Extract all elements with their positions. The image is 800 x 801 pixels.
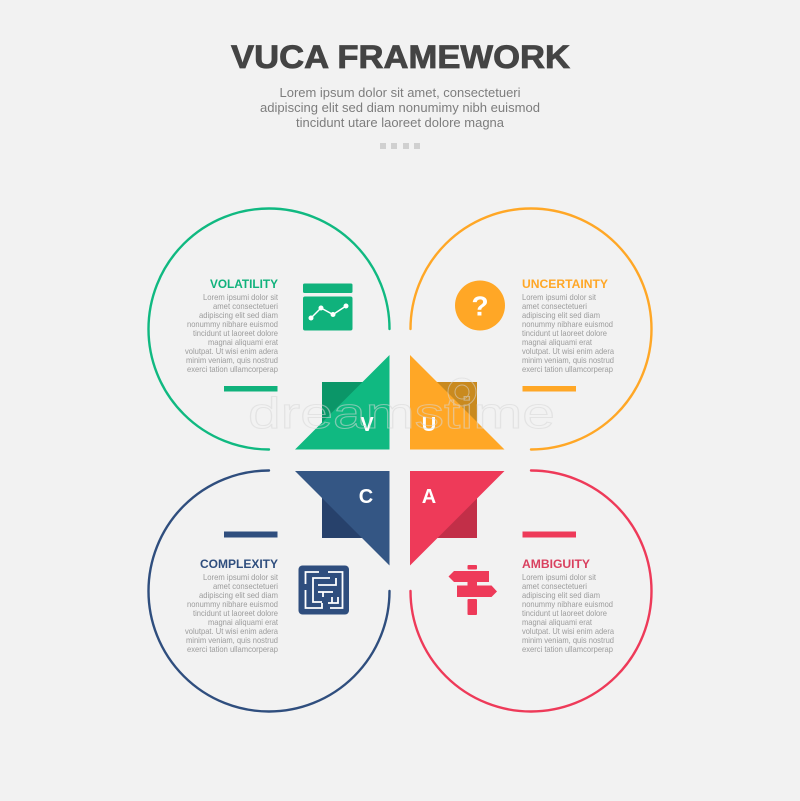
ambiguity text: minim veniam, quis nostrud — [522, 635, 614, 645]
complexity ring — [149, 470, 390, 712]
uncertainty text: amet consectetueri — [522, 301, 587, 311]
complexity text: Lorem ipsumi dolor sit — [203, 572, 279, 582]
panel: volatility — [149, 209, 390, 450]
watermark: dreamstime — [248, 389, 555, 438]
centre shape: U — [410, 355, 504, 450]
ambiguity text — [522, 572, 614, 654]
centre shape: C: C — [359, 486, 373, 508]
icon: maze — [298, 566, 349, 614]
ambiguity dash — [522, 532, 576, 538]
icon: signpost — [448, 565, 497, 615]
centre shape: C — [295, 471, 390, 566]
icon: question mark — [455, 280, 505, 330]
icon: chart window — [303, 284, 352, 330]
centre shape: A: A — [422, 486, 436, 508]
complexity dash — [224, 532, 278, 538]
volatility text: nonummy nibhare euismod — [187, 319, 278, 329]
volatility text: Lorem ipsumi dolor sit — [203, 292, 279, 302]
uncertainty text: tincidunt ut laoreet dolore — [522, 328, 607, 338]
volatility ring — [149, 209, 390, 450]
ambiguity text: nonummy nibhare euismod — [522, 599, 613, 609]
complexity text: amet consectetueri — [213, 581, 278, 591]
panel: uncertainty — [410, 209, 652, 450]
volatility text: minim veniam, quis nostrud — [186, 355, 278, 365]
volatility text: tincidunt ut laoreet dolore — [193, 328, 278, 338]
ambiguity text: adipiscing elit sed diam — [522, 590, 600, 600]
uncertainty text: volutpat. Ut wisi enim adera — [522, 346, 614, 356]
uncertainty ring — [410, 209, 652, 450]
complexity text: tincidunt ut laoreet dolore — [193, 608, 278, 618]
volatility text: adipiscing elit sed diam — [199, 310, 278, 320]
uncertainty text: exerci tation ullamcorperap — [522, 364, 613, 374]
uncertainty text: Lorem ipsumi dolor sit — [522, 292, 597, 302]
panel: complexity — [149, 470, 390, 712]
subtitle — [260, 85, 540, 130]
volatility text — [185, 292, 279, 374]
uncertainty text: adipiscing elit sed diam — [522, 310, 600, 320]
volatility text: exerci tation ullamcorperap — [187, 364, 278, 374]
centre shape: U: U — [422, 414, 436, 436]
complexity text: adipiscing elit sed diam — [199, 590, 278, 600]
centre shape: A — [410, 471, 504, 566]
complexity text: magnai aliquami erat — [208, 617, 279, 627]
uncertainty text — [522, 292, 614, 374]
ambiguity text: amet consectetueri — [522, 581, 587, 591]
volatility text: amet consectetueri — [213, 301, 278, 311]
centre shape: V — [295, 355, 390, 450]
subtitle: Lorem ipsum dolor sit amet, consectetueri — [280, 85, 521, 100]
volatility heading: VOLATILITY — [210, 277, 278, 291]
complexity heading: COMPLEXITY — [200, 557, 278, 571]
panel: ambiguity — [410, 470, 652, 712]
centre shape: V: V — [360, 414, 374, 436]
ambiguity ring — [410, 470, 652, 712]
volatility text: magnai aliquami erat — [208, 337, 279, 347]
complexity text — [185, 572, 279, 654]
ambiguity text: tincidunt ut laoreet dolore — [522, 608, 607, 618]
complexity text: volutpat. Ut wisi enim adera — [185, 626, 278, 636]
complexity text: minim veniam, quis nostrud — [186, 635, 278, 645]
title: VUCA FRAMEWORK — [231, 39, 570, 75]
subtitle: adipiscing elit sed diam nonumimy nibh euismod — [260, 100, 540, 115]
uncertainty dash — [522, 386, 576, 392]
watermark — [248, 378, 555, 438]
ambiguity text: Lorem ipsumi dolor sit — [522, 572, 597, 582]
complexity text: exerci tation ullamcorperap — [187, 644, 278, 654]
ambiguity text: volutpat. Ut wisi enim adera — [522, 626, 614, 636]
complexity text: nonummy nibhare euismod — [187, 599, 278, 609]
icon: question mark: ? — [471, 290, 489, 322]
ambiguity text: exerci tation ullamcorperap — [522, 644, 613, 654]
ambiguity text: magnai aliquami erat — [522, 617, 593, 627]
uncertainty heading: UNCERTAINTY — [522, 277, 608, 291]
title dots — [380, 143, 420, 149]
ambiguity heading: AMBIGUITY — [522, 557, 590, 571]
uncertainty text: nonummy nibhare euismod — [522, 319, 613, 329]
subtitle: tincidunt utare laoreet dolore magna — [296, 115, 505, 130]
volatility text: volutpat. Ut wisi enim adera — [185, 346, 278, 356]
volatility dash — [224, 386, 278, 392]
uncertainty text: magnai aliquami erat — [522, 337, 593, 347]
uncertainty text: minim veniam, quis nostrud — [522, 355, 614, 365]
